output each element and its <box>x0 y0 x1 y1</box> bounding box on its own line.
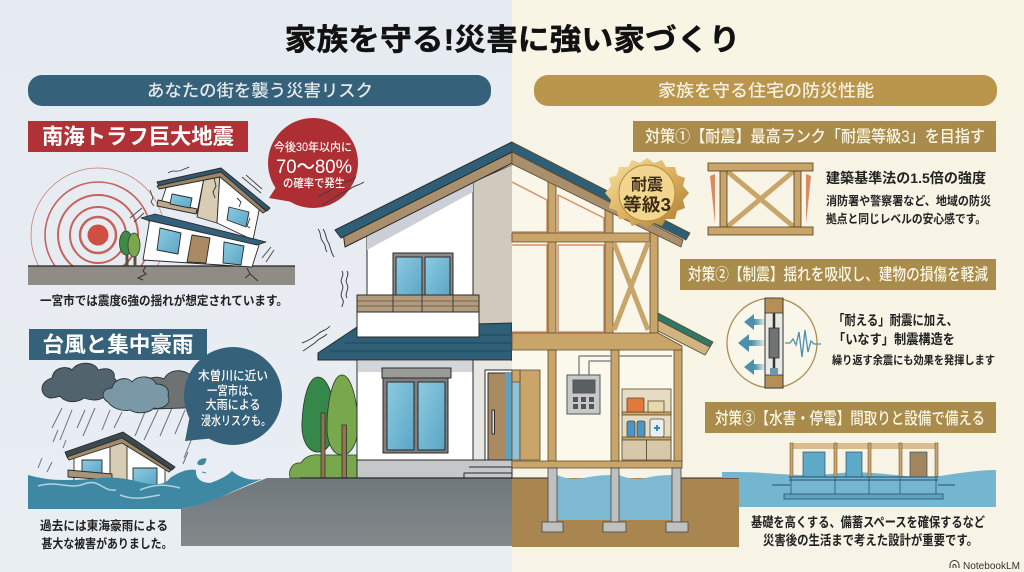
ground: soil right <box>512 478 739 547</box>
panel: Nankai Trough earthquake <box>28 118 358 308</box>
text: past flood damage <box>40 518 172 551</box>
heading: measure 3 <box>705 402 996 433</box>
text: measure 1 detail: 消防署や警察署など、地域の防災 <box>826 193 991 208</box>
callout: 70-80% probability: 今後30年以内に <box>274 140 352 154</box>
door frame cut <box>512 370 520 460</box>
blue roof right <box>512 142 690 240</box>
floor beam <box>512 333 682 350</box>
water <box>28 470 262 509</box>
header: right performance: 家族を守る住宅の防災性能 <box>658 82 874 100</box>
lower wall <box>357 360 512 460</box>
columns and beams <box>548 182 556 333</box>
callout: Kiso river risk <box>184 347 282 445</box>
header: left risks: あなたの街を襲う災害リスク <box>147 82 373 100</box>
porch roof right <box>658 320 710 355</box>
text: past flood damage: 甚大な被害がありました。 <box>42 536 172 551</box>
upper wall <box>367 165 512 335</box>
upper window <box>393 253 453 297</box>
icon: raised house in flood <box>722 443 996 507</box>
icon: small trees <box>120 231 140 266</box>
panel: measure 3 flood and outage <box>705 402 996 548</box>
badge: seismic grade 3: 等級3 <box>623 194 671 215</box>
foundation with flood water <box>512 468 739 532</box>
badge: seismic grade 3: 耐震 <box>631 176 663 194</box>
red insulation panels <box>512 182 604 332</box>
illustration: house cutaway structure (right half) <box>512 142 713 468</box>
base and steps <box>357 460 512 478</box>
text: expected intensity: 一宮市では震度6強の揺れが想定されています。 <box>40 293 288 308</box>
text: measure 2 detail: 「耐える」耐震に加え、 <box>833 313 958 328</box>
icon: storm clouds <box>42 363 214 413</box>
icon: damper circle <box>727 298 821 388</box>
panel: measure 1 seismic resistance <box>633 121 996 235</box>
icon: flooded house <box>65 432 175 490</box>
ground: asphalt left <box>181 478 512 546</box>
door <box>485 370 512 460</box>
icon: distribution board <box>567 375 600 414</box>
pipes <box>579 356 672 375</box>
header: right performance <box>534 75 997 106</box>
callout: Kiso river risk: 一宮市は、 <box>207 383 259 398</box>
icon: rain streaks <box>38 408 192 472</box>
text: measure 3 detail: 災害後の生活まで考えた設計が重要です。 <box>763 532 978 548</box>
text: measure 2 detail: 「いなす」制震構造を <box>833 331 955 347</box>
heading: measure 1: 対策①【耐震】最高ランク「耐震等級3」を目指す <box>645 127 985 146</box>
lower window <box>382 368 451 378</box>
illustration: trees by house <box>290 375 358 478</box>
upper wall fill <box>512 165 658 333</box>
callout: 70-80% probability: 70〜80% <box>276 157 352 178</box>
heading: earthquake <box>28 121 248 152</box>
title: 家族を守る!災害に強い家づくり <box>284 24 740 57</box>
x brace <box>614 243 648 330</box>
balcony <box>357 295 479 312</box>
callout: Kiso river risk: 浸水リスクも。 <box>201 413 271 428</box>
callout: 70-80% probability <box>268 118 358 208</box>
icon: tilted damaged house <box>141 168 270 267</box>
ground with cracks <box>28 266 295 285</box>
text: measure 2 detail <box>832 313 995 367</box>
badge: seismic grade 3 <box>605 158 689 228</box>
panel: measure 2 vibration control <box>680 259 996 388</box>
text: measure 3 detail <box>751 514 985 548</box>
panel: typhoon and heavy rain <box>28 329 282 551</box>
motion lines: shaking house <box>302 177 364 351</box>
text: measure 1 detail: 拠点と同じレベルの安心感です。 <box>826 211 986 226</box>
icon: storage shelf <box>622 389 671 460</box>
brown under-roof right <box>512 152 683 247</box>
blue roof <box>335 142 512 238</box>
text: measure 2 detail: 繰り返す余震にも効果を発揮します <box>832 353 995 367</box>
callout: Kiso river risk: 大雨による <box>206 398 260 412</box>
heading: typhoon: 台風と集中豪雨 <box>42 333 194 357</box>
credit: NotebookLM: NotebookLM <box>963 561 1020 572</box>
icon: braced frame <box>708 163 813 235</box>
lower roof <box>318 323 512 360</box>
heading: earthquake: 南海トラフ巨大地震 <box>42 125 234 149</box>
heading: measure 2 <box>680 259 996 290</box>
heading: typhoon <box>29 329 207 360</box>
lower wall <box>512 350 682 461</box>
callout: Kiso river risk: 木曽川に近い <box>198 368 268 383</box>
background: right protection side <box>512 0 1024 572</box>
text: measure 1 detail <box>826 170 991 226</box>
background: left risk side <box>0 0 512 572</box>
text: past flood damage: 過去には東海豪雨による <box>40 518 168 533</box>
icon: seismic rings <box>30 168 162 266</box>
floor sill <box>512 461 682 468</box>
brown under-roof <box>343 152 512 247</box>
motion lines: quake <box>130 167 274 262</box>
illustration: finished house exterior (left half) <box>300 142 512 478</box>
header: left risks <box>28 75 491 106</box>
text: measure 1 detail: 建築基準法の1.5倍の強度 <box>826 170 986 186</box>
heading: measure 1 <box>633 121 996 152</box>
callout: 70-80% probability: の確率で発生 <box>283 176 345 190</box>
lower columns <box>548 350 556 461</box>
